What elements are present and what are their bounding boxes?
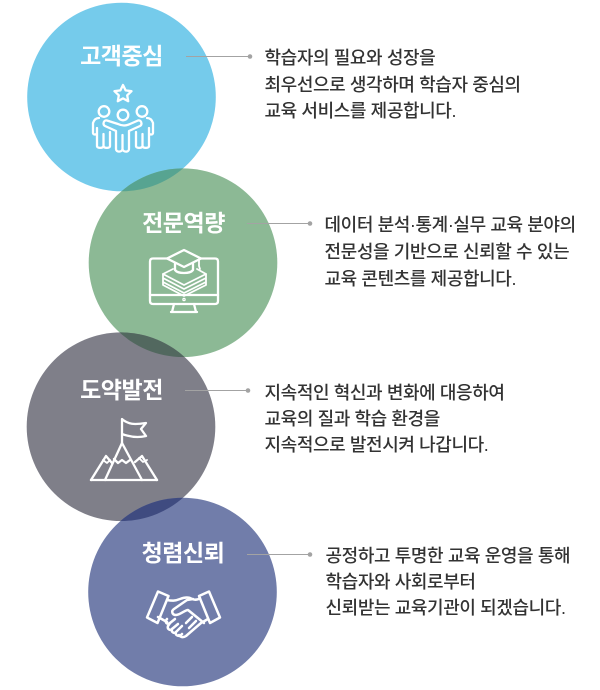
description 2: 전문성을 기반으로 신뢰할 수 있는 [324,242,569,262]
description 1 [264,48,521,121]
description 3 [264,383,505,455]
description 2: 데이터 분석·통계·실무 교육 분야의 [324,215,576,235]
icon: handshake [147,592,220,637]
heading: 전문역량: 전문역량 [142,210,225,236]
overlap: green and gray [120,332,184,357]
connector line 2 [247,221,312,226]
connector line 1 [186,54,252,59]
icon: mountain with flag [91,419,157,480]
description 1: 최우선으로 생각하며 학습자 중심의 [264,75,521,95]
description 2 [324,215,576,289]
circle: 도약발전 [27,332,215,521]
heading: 도약발전: 도약발전 [80,377,163,403]
connector line 4 [247,552,312,557]
overlap: blue and green [121,168,184,192]
circle: 전문역량 [89,168,277,357]
description 3: 교육의 질과 학습 환경을 [264,409,440,429]
circle: 청렴신뢰 [88,498,277,686]
description 3: 지속적으로 발전시켜 나갑니다. [264,435,488,455]
description 4: 신뢰받는 교육기관이 되겠습니다. [326,598,566,618]
heading: 고객중심: 고객중심 [80,43,163,69]
icon: people with star [93,85,153,152]
description 4: 학습자와 사회로부터 [326,572,476,592]
connector line 3 [185,388,250,393]
description 4 [326,546,570,618]
description 4: 공정하고 투명한 교육 운영을 통해 [326,546,570,566]
description 2: 교육 콘텐츠를 제공합니다. [324,269,516,289]
heading: 청렴신뢰: 청렴신뢰 [142,540,224,566]
icon: monitor with graduation cap [150,250,218,312]
overlap: gray and indigo [120,498,183,521]
description 1: 학습자의 필요와 성장을 [264,48,435,68]
description 3: 지속적인 혁신과 변화에 대응하여 [264,383,505,403]
circle: 고객중심 [27,3,216,191]
description 1: 교육 서비스를 제공합니다. [264,101,456,121]
